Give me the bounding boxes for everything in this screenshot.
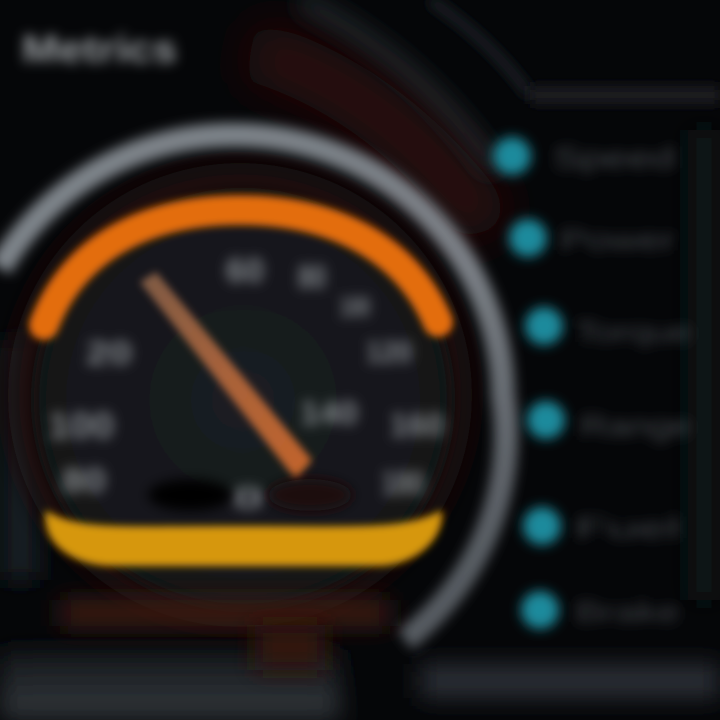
item 2: Power [560, 224, 675, 257]
item 2 [509, 219, 675, 257]
needle hub shadow [148, 479, 232, 511]
gauge numbers: 100 [48, 405, 114, 446]
gauge numbers: 120 [366, 336, 412, 369]
item 3 [525, 307, 693, 349]
gauge numbers [48, 252, 444, 515]
orange arc [44, 210, 438, 325]
gauge outer ring [0, 135, 506, 640]
item 5 [523, 507, 680, 545]
gauge numbers: 0 [232, 482, 264, 515]
item 5: Fuel [575, 512, 680, 545]
item 4: Range [580, 410, 692, 443]
item 1 [493, 137, 675, 175]
gauge face [35, 192, 451, 608]
title: Metrics [22, 29, 177, 71]
background curved streaks [250, 0, 720, 698]
item 4 [527, 401, 692, 443]
gauge numbers: 100 [340, 291, 370, 322]
gauge numbers: 140 [300, 395, 358, 431]
gauge numbers: 60 [226, 252, 264, 290]
gauge [0, 135, 506, 640]
gauge numbers: 20 [86, 335, 132, 371]
gauge numbers: 180 [382, 465, 424, 501]
item 3: Torque [575, 316, 693, 349]
item 1: Speed [553, 142, 675, 175]
gauge numbers: 80 [298, 259, 326, 295]
left panel haze [0, 340, 40, 580]
yellow bar [45, 510, 442, 566]
list [493, 137, 693, 629]
gauge numbers: 160 [390, 407, 444, 443]
item 6 [521, 591, 680, 629]
gauge dark surround [8, 163, 472, 627]
reflection [0, 600, 390, 720]
needle [140, 272, 312, 480]
item 6: Brake [575, 596, 680, 629]
gauge numbers: 80 [62, 462, 106, 500]
